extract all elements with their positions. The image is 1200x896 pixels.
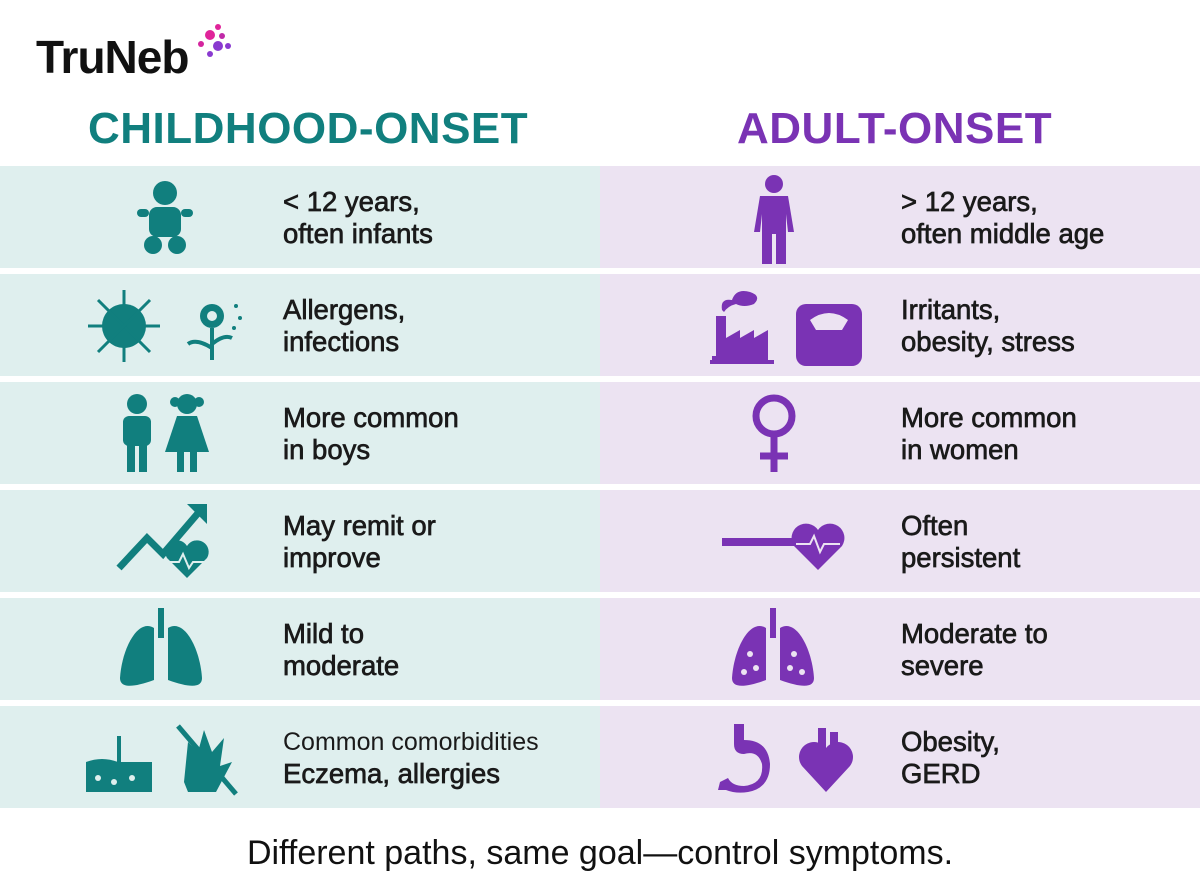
panel: childhood rows [0,166,600,808]
text: triggers [901,294,1075,358]
text: age [283,186,433,249]
text: severity: moderate [283,650,399,681]
text: severity: severe [901,650,984,681]
text: severity [901,618,1048,681]
text: triggers: infections [283,326,399,357]
icon: flat line heart [722,524,844,570]
icon: virus and flower [88,290,242,362]
heading: childhood: CHILDHOOD-ONSET [88,104,528,153]
text: triggers [282,294,405,357]
text: course: Often [901,510,968,541]
logo [36,24,231,83]
text: age: < 12 years, [283,186,420,217]
icon: factory and scale [710,291,862,366]
footer tagline: Different paths, same goal—control symptoms. [247,834,953,872]
text: sex [283,402,459,466]
text: course: improve [283,542,381,573]
text: course [283,510,436,574]
icon: lungs spotted [732,608,814,686]
heading: adult: ADULT-ONSET [737,104,1052,153]
icon: baby [137,181,193,254]
icon: female symbol [752,394,796,472]
text: severity [283,618,399,681]
text: comorbidities: GERD [901,758,980,789]
text: course [901,510,1020,574]
icon: stomach and heart [718,724,853,793]
text: sex: in boys [283,434,370,465]
text: severity: Mild to [283,618,364,649]
text: age [901,186,1104,250]
text: course: persistent [901,542,1020,573]
icon: skin and hand [86,724,238,796]
icon: adult [754,175,794,264]
logo: TruNeb [36,31,188,83]
text: course: May remit or [283,510,436,541]
text: comorbidities: Common comorbidities [283,728,539,756]
text: triggers: obesity, stress [901,326,1075,357]
icon: arrow heart [116,504,209,578]
text: sex: More common [283,402,459,433]
text: comorbidities [901,726,1000,789]
text: sex [901,402,1077,465]
text: comorbidities: Eczema, allergies [283,758,500,789]
text: age: > 12 years, [901,186,1038,217]
icon: boy and girl [123,394,209,472]
text: age: often infants [283,218,433,249]
text: triggers: Allergens, [283,294,405,325]
text: comorbidities: Obesity, [901,726,1000,757]
text: sex: in women [901,434,1019,465]
icon: lungs [120,608,202,686]
text: age: often middle age [901,218,1104,249]
text: severity: Moderate to [901,618,1048,649]
text: triggers: Irritants, [901,294,1000,325]
text: sex: More common [901,402,1077,433]
text: comorbidities [283,728,539,790]
panel: adult rows [600,166,1200,808]
